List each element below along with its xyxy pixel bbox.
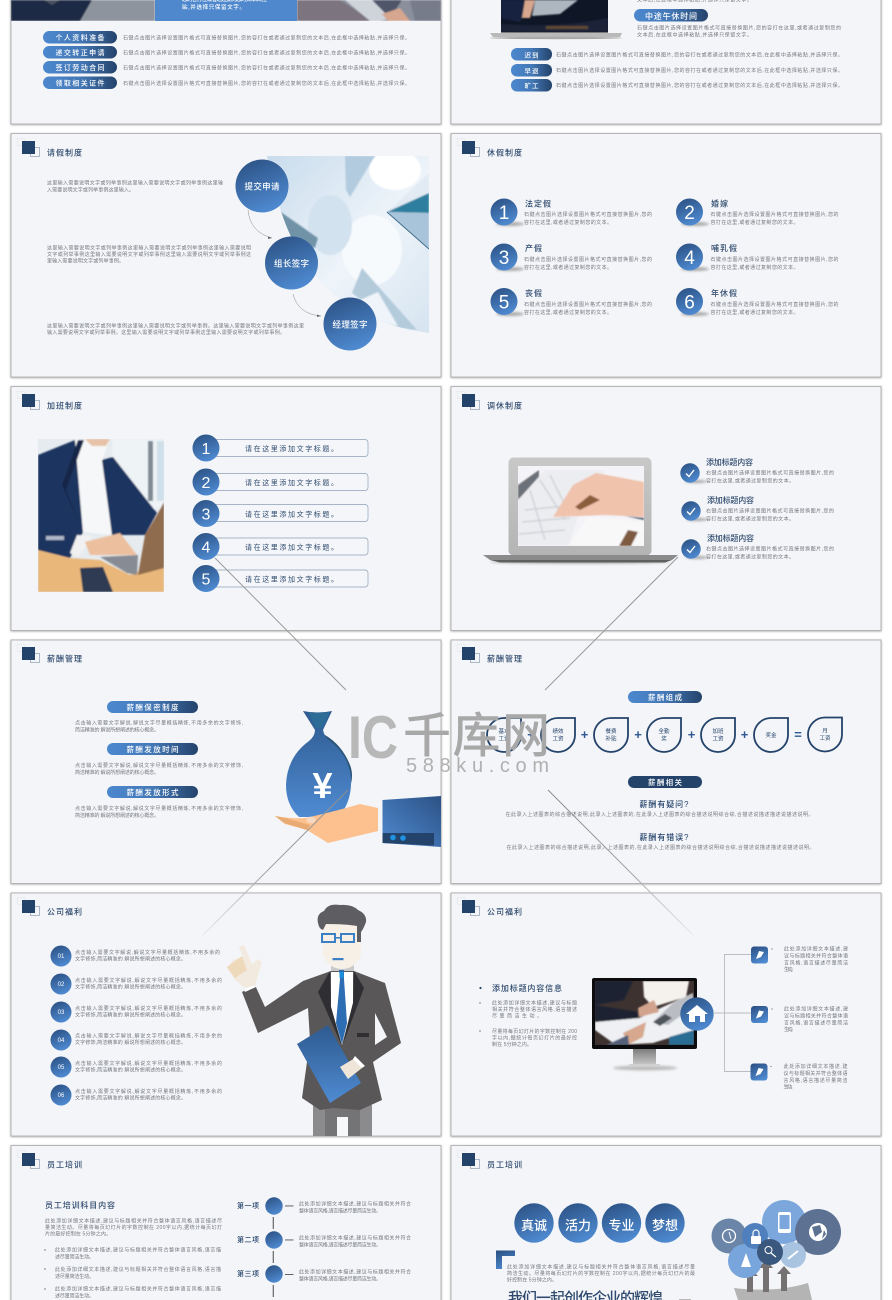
heading: 公司福利: 公司福利 (47, 906, 82, 916)
item 5: 丧假: 丧假 (525, 288, 542, 298)
item 4: 哺乳假: 哺乳假 (711, 243, 737, 253)
check item 1: 容打在这里,或者通过复制您的文本。 (706, 478, 794, 484)
text block: left description: 尽量简洁生动。 (492, 1012, 542, 1020)
panel: welfare diagram (451, 893, 881, 1136)
corner bracket (496, 1250, 515, 1269)
step circle: 经理签字 (324, 298, 376, 350)
list item 5 (192, 565, 368, 592)
item 6: 年休假: 容打在这里,或者通过复制您的文本。 (710, 309, 798, 316)
timeline: 第一项: 整体语言风格,语言描述尽量简洁生动。 (299, 1208, 381, 1214)
item 4: 哺乳假: 石键点击图片选择设置图片格式可直接替换图片,您的 (710, 256, 838, 263)
step: 个人资料准备 (43, 31, 410, 44)
header photo strip (11, 0, 441, 21)
break-time section: 中途午休时间 (645, 11, 697, 21)
drop: 全勤奖 (647, 718, 681, 752)
item 1: 法定假: 容打在这里,或者通过复制您的文本。 (524, 219, 612, 226)
text block: step 1: 这里输入需要说明文字或列举事例这里输入需要说明文字或列举事例这里输 (47, 180, 223, 186)
panel: holiday types (451, 134, 881, 377)
text with icon: branch 2: 议与标题相关并符合整体语 (784, 1012, 848, 1020)
step: 领取相关证件 (43, 76, 410, 89)
check item 2: 右键点击图片选择设置图片格式可直接替换图片,您的 (706, 508, 834, 514)
section: 薪酬发放形式: 点击输入需要文字解说,解说文字尽量概括精炼,不用多余的文字修饰, (75, 805, 243, 812)
timeline: 第三项: 第三项 (237, 1269, 259, 1278)
item 06 (50, 1084, 222, 1106)
value circle: 专业: 专业 (608, 1218, 634, 1233)
heading: 薪酬管理 (458, 644, 522, 664)
icon: home circle (680, 997, 714, 1031)
drop: 绩效工资: 工资 (552, 734, 564, 742)
step: 递交转正申请: 石键点击图片选择设置图片格式可直接替换图片,您的容打在或者通过复制您的文本后,在此框中选择粘贴,并选择只保。 (123, 50, 410, 56)
text with icon: branch 3: 此处添加详细文本描述,建 (784, 1063, 848, 1070)
arrow: step 1 to 2 (248, 210, 272, 239)
panel: time off in lieu (451, 386, 881, 630)
step: 递交转正申请 (43, 46, 410, 58)
step circle: 组长签字 (265, 236, 318, 290)
check item 1: 右键点击图片选择设置图片格式可直接替换图片,您的 (706, 470, 834, 476)
heading: 薪酬管理 (18, 644, 82, 664)
item 1: 法定假: 1 (499, 203, 509, 224)
text with icon: branch 2: 此处添加详细文本描述,建 (784, 1006, 848, 1012)
item 06: 06 (58, 1093, 65, 1099)
check item 3: 添加标题内容 (707, 533, 754, 543)
list item 3 (192, 500, 368, 527)
break-time section: 石键点击图片选择设置图片格式可直接替换图片,您的容打在这里,或者通过复制您的 (637, 24, 841, 32)
step: 个人资料准备: 石键点击图片选择设置图片格式可直接替换图片,您的容打在或者通过复制您的文本后,在此框中选择粘贴,并选择只保。 (123, 34, 410, 42)
item 5: 丧假: 5 (499, 292, 509, 314)
item 04: 04 (58, 1038, 65, 1044)
heading: 员工培训: 员工培训 (47, 1160, 82, 1170)
drop: 月工资 (808, 718, 842, 752)
check item 3: 右键点击图片选择设置图片格式可直接替换图片,您的 (706, 546, 834, 552)
question: 薪酬有错误 (506, 832, 814, 851)
timeline: 第三项: 整体语言风格,语言描述尽量简洁生动。 (299, 1276, 381, 1282)
illustration: money bag on hand (275, 711, 441, 847)
watermark: 千库网 588ku.com: 588ku.com (406, 755, 549, 777)
timeline: 第二项 (237, 1217, 411, 1249)
item 6: 年休假: 6 (684, 292, 695, 314)
heading: 薪酬管理: 薪酬管理 (47, 654, 82, 664)
item 4: 哺乳假 (676, 243, 838, 271)
check item 1: 添加标题内容 (706, 457, 753, 467)
text with icon: branch 3 (750, 1063, 848, 1090)
drop: 加班工资 (701, 718, 735, 752)
step: 签订劳动合同 (43, 61, 410, 74)
operators: + (581, 727, 589, 742)
drop: 基本工资 (487, 718, 521, 752)
section: 薪酬保密制度 (75, 701, 243, 734)
heading: 员工培训 (458, 1150, 522, 1170)
list item 4 (192, 533, 368, 560)
text block: step 3 (47, 322, 304, 336)
text block: step 3: 这里输入需要说明文字或列举事例这里输入需要说明文字或列举事例。这里输入需要说明文字或列举事例这里 (47, 322, 304, 330)
text with icon: branch 2: 生动。 (784, 1026, 796, 1033)
panel: onboarding steps (11, 0, 441, 124)
check item 2: 容打在这里,或者通过复制您的文本。 (706, 516, 794, 522)
list item 2: 请在这里添加文字标题。 (245, 478, 338, 487)
value circle: 活力: 活力 (565, 1218, 591, 1233)
question: 薪酬有错误: 在此录入上述图表的综合描述说明,此录入上述图表的,在此录入上述图表的综合描述说明综合综,合描述说描述描述说描述说明。 (506, 844, 814, 851)
rule: 早退: 石键点击图片选择设置图片格式可直接替换图片,您的容打在或者通过复制您的文本后,在此框中选择粘贴,并选择只保。 (556, 67, 843, 74)
text block: values description: 简洁生动。尽量将每页幻灯片的字数控制在 200字以内,据统计每页幻灯片的最 (507, 1270, 695, 1277)
heading: 加班制度 (18, 392, 82, 410)
panel: attendance rules (451, 0, 881, 124)
rule: 早退 (511, 64, 843, 76)
item 4: 哺乳假: 容打在这里,或者通过复制您的文本。 (710, 264, 798, 271)
item 04 (50, 1030, 222, 1050)
watermark: 千库网 588ku.com (348, 704, 550, 777)
text block: training content (44, 1200, 222, 1300)
text block: values description: 此处添加详细文本描述,建议与标题相关并符合整体语言风格,语言描述尽量 (507, 1264, 695, 1270)
heading: 员工培训 (18, 1150, 82, 1170)
item 01 (50, 946, 220, 966)
item 1: 法定假 (490, 198, 652, 226)
text with icon: branch 1: 此处添加详细文本描述,建 (784, 946, 848, 952)
item 05 (50, 1056, 222, 1078)
panel: salary secrecy and payment (11, 640, 441, 884)
section: 薪酬发放时间: 点击输入需要文字解说,解说文字尽量概括精炼,不用多余的文字修饰, (75, 762, 243, 769)
text with icon: branch 1: 生动。 (784, 966, 796, 973)
item 3: 产假: 3 (499, 248, 509, 269)
panel: welfare list (11, 893, 441, 1136)
monitor with meeting photo (592, 978, 697, 1070)
timeline: 第二项: 整体语言风格,语言描述尽量简洁生动。 (299, 1242, 381, 1248)
timeline: 第一项: 此处添加详细文本描述,建议与标题相关并符合 (299, 1200, 411, 1208)
drop: 餐费补贴: 补贴 (605, 734, 617, 742)
drop: 全勤奖: 全勤 (658, 727, 670, 735)
operators: = (794, 727, 802, 742)
text block: left description: 字以内,据统计每页幻灯片的最好控 (492, 1034, 577, 1042)
item 01: 点击输入需要文字解说,解说文字尽量概括精炼,不用多余的 (75, 949, 220, 956)
operators: + (527, 727, 535, 742)
watermark: diagonal lines (203, 557, 693, 935)
item 05: 文字修饰,简洁精准的 解说所想阐述的核心概念。 (75, 1066, 186, 1074)
check item 2: 添加标题内容 (707, 495, 754, 505)
item 2: 婚嫁: 容打在这里,或者通过复制您的文本。 (710, 219, 798, 226)
text block: training content: 此处添加详细文本描述,建议与标题相关并符合整体语言风格,语言描 (55, 1286, 221, 1292)
step circle: 提交申请: 提交申请 (244, 182, 280, 192)
break-time section: 文本后,在此框中选择粘贴,并选择只保留文字。 (637, 32, 752, 38)
watermark: 千库网 588ku.com: IC (348, 704, 398, 771)
item 3: 产假: 石键点击图片选择设置图片格式可直接替换图片,您的 (524, 256, 652, 263)
photo: man at laptop (38, 439, 164, 592)
drop: 基本工资: 基本 (498, 727, 510, 735)
question: 薪酬有疑问: 薪酬有疑问? (640, 799, 689, 809)
check item 3 (681, 533, 834, 560)
panel: leave request (11, 134, 441, 377)
section: 薪酬发放形式: 简洁精准的 解说所想阐述的核心概念。 (75, 812, 159, 819)
text block: training content: 此处添加详细文本描述,建议与标题相关并符合整体语言风格,语言描述尽 (45, 1218, 222, 1224)
drop: 月工资: 月 (822, 728, 828, 734)
step: 递交转正申请: 递交转正申请 (56, 48, 104, 57)
check item 2 (681, 495, 834, 522)
heading: 公司福利 (458, 898, 522, 916)
step circle: 提交申请 (236, 160, 288, 212)
item 05: 点击输入需要文字解说,解说文字尽量概括精炼,不用多余的 (75, 1060, 222, 1067)
item 2: 婚嫁 (676, 198, 838, 226)
photo: skyscrapers (267, 150, 429, 333)
timeline: 第三项 (237, 1251, 411, 1297)
heading: 休假制度: 休假制度 (487, 148, 522, 158)
heading: 调休制度 (458, 392, 522, 410)
item 3: 产假: 容打在这里,或者通过复制您的文本。 (524, 264, 612, 271)
item 2: 婚嫁: 婚嫁 (711, 198, 728, 208)
text with icon: branch 2 (751, 1006, 848, 1033)
value circle: 专业 (602, 1203, 641, 1243)
timeline: 第三项: 此处添加详细文本描述,建议与标题相关并符合 (299, 1268, 411, 1276)
text block: values description (507, 1264, 695, 1284)
text block: training content: 量简洁生动。尽量将每页幻灯片的字数控制在 200字以内,据统计每页幻灯 (45, 1224, 222, 1231)
value circle: 活力 (558, 1203, 598, 1243)
heading: 调休制度: 调休制度 (487, 400, 522, 410)
item 6: 年休假: 石键点击图片选择设置图片格式可直接替换图片,您的 (710, 301, 838, 308)
section: 薪酬发放形式 (75, 786, 243, 819)
text block: training content: 述尽量简洁生动。 (55, 1254, 94, 1260)
item 3: 产假 (490, 243, 652, 271)
item 4: 哺乳假: 4 (684, 248, 695, 269)
item 2: 婚嫁: 石键点击图片选择设置图片格式可直接替换图片,您的 (710, 211, 838, 218)
text block: step 1: 入需要说明文字或列举事例这里输入。 (47, 186, 134, 194)
item 03: 03 (58, 1010, 65, 1016)
item 5: 丧假 (490, 288, 652, 316)
text with icon: branch 3: 生动。 (784, 1084, 796, 1090)
heading: 薪酬管理: 薪酬管理 (487, 654, 522, 664)
drop: 奖金 (754, 718, 788, 752)
rule: 迟到 (511, 48, 843, 60)
drop: 餐费补贴 (594, 718, 628, 752)
item 6: 年休假: 年休假 (711, 288, 737, 298)
text with icon: branch 3: 言风格,语言描述尽量简洁 (784, 1077, 848, 1084)
text block: step 2: 这里输入需要说明文字或列举事例这里输入需要说明文字或列举事例这里输入需要说明 (47, 244, 251, 252)
item 05: 05 (58, 1065, 65, 1071)
text block: step 1 (47, 180, 223, 194)
section: 薪酬发放时间: 薪酬发放时间 (126, 744, 178, 754)
item 04: 文字修饰,简洁精准的 解说所想阐述的核心概念。 (75, 1039, 186, 1046)
drop: 餐费补贴: 餐费 (605, 727, 617, 735)
timeline: 第二项: 第二项 (237, 1235, 259, 1244)
panel: training subjects (11, 1146, 441, 1300)
text block: step 3: 输入需要说明文字或列举事例。这里输入需要说明文字或列举事例这里输入需要说明文字或列举事例。 (47, 329, 285, 336)
drop: 全勤奖: 奖 (661, 734, 667, 742)
value circle: 梦想: 梦想 (652, 1218, 678, 1233)
operators: + (688, 727, 696, 742)
text with icon: branch 3: 议与标题相关并符合整体语 (784, 1070, 848, 1077)
step: 签订劳动合同: 签订劳动合同 (56, 63, 104, 72)
list item 3: 请在这里添加文字标题。 (245, 510, 338, 518)
text block: training content: 述尽量简洁生动。 (55, 1273, 94, 1280)
text block: values description: 好控制在 5分钟之内。 (507, 1276, 557, 1284)
step circle: 经理签字: 经理签字 (332, 320, 368, 330)
section: 薪酬保密制度: 点击输入需要文字解说,解说文字尽量概括精炼,不用多余的文字修饰, (75, 720, 243, 726)
step: 签订劳动合同: 石键点击图片选择设置图片格式可直接替换图片,您的容打在或者通过复制您的文本后,在此框中选择粘贴,并选择只保。 (123, 64, 410, 72)
pill: 薪酬组成 (628, 691, 702, 703)
pill: 薪酬相关 (628, 776, 702, 788)
laptop with keyboard photo (483, 458, 678, 564)
list item 4: 4 (202, 540, 211, 556)
text block: left description: 制在 5分钟之内。 (492, 1041, 532, 1048)
panel: overtime (11, 386, 441, 630)
text block: left description (479, 983, 577, 1048)
item 06: 文字修饰,简洁精准的 解说所想阐述的核心概念。 (75, 1094, 186, 1102)
item 5: 丧假: 容打在这里,或者通过复制您的文本。 (524, 309, 612, 316)
rule: 旷工: 石键点击图片选择设置图片格式可直接替换图片,您的容打在或者通过复制您的文本后,在此框中选择粘贴,并选择只保。 (556, 82, 843, 89)
section: 薪酬发放时间: 简洁精准的 解说所想阐述的核心概念。 (75, 769, 159, 776)
item 5: 丧假: 石键点击图片选择设置图片格式可直接替换图片,您的 (524, 301, 652, 308)
connector lines (713, 954, 751, 1072)
item 02: 02 (58, 982, 65, 988)
step: 领取相关证件: 石键点击图片选择设置图片格式可直接替换图片,您的容打在或者通过复制您的文本后,在此框中选择粘贴,并选择只保。 (123, 80, 410, 87)
list item 1: 1 (202, 441, 211, 458)
item 03: 文字修饰,简洁精准的 解说所想阐述的核心概念。 (75, 1012, 186, 1018)
item 02: 点击输入需要文字解说,解说文字尽量概括精炼,不用多余的 (75, 977, 222, 984)
list item 2: 2 (202, 475, 211, 492)
text block: left description: 此处添加详细文本描述,建议与标题 (492, 1000, 577, 1006)
item 02: 文字修饰,简洁精准的 解说所想阐述的核心概念。 (75, 984, 186, 990)
heading: 公司福利: 公司福利 (487, 906, 522, 916)
item 2: 婚嫁: 2 (684, 203, 695, 224)
pill: 薪酬相关: 薪酬相关 (648, 777, 682, 787)
text block: step 2: 文字或列举事例这里输入需要说明文字或列举事例这里输入需要说明文字或列举事例这 (47, 251, 251, 258)
drop: 奖金: 奖金 (765, 731, 777, 739)
text block: training content: 员工培训科目内容 (45, 1200, 115, 1210)
drop: 月工资: 工资 (819, 734, 831, 742)
item 1: 法定假: 石键点击图片选择设置图片格式可直接替换图片,您的 (524, 211, 652, 218)
item 03: 点击输入需要文字解说,解说文字尽量概括精炼,不用多余的 (75, 1005, 222, 1012)
rule: 旷工 (511, 79, 843, 92)
list item 3: 3 (202, 506, 211, 524)
heading: 加班制度: 加班制度 (47, 400, 82, 410)
step: 领取相关证件: 领取相关证件 (56, 78, 104, 88)
drop: 绩效工资 (541, 718, 575, 752)
operators (527, 727, 802, 742)
operators: + (741, 727, 749, 742)
list item 5: 请在这里添加文字标题。 (245, 574, 338, 584)
header photo strip: 贴,并选择只保留文字。 (182, 3, 245, 11)
check item 3: 容打在这里,或者通过复制您的文本。 (706, 554, 794, 560)
section: 薪酬发放形式: 薪酬发放形式 (126, 787, 179, 797)
rule: 早退: 早退 (524, 66, 539, 75)
item 01: 文字修饰,简洁精准的 解说所想阐述的核心概念。 (75, 956, 186, 962)
illustration: idea tree icons (712, 1200, 841, 1300)
rule: 迟到: 迟到 (524, 50, 538, 60)
formula: salary components (487, 718, 842, 752)
text with icon: branch 2: 言风格,语言描述尽量简洁 (784, 1020, 848, 1026)
text block: left description: 尽量将每页幻灯片的字数控制在 200 (492, 1028, 577, 1035)
laptop photo (490, 0, 622, 39)
text block: step 2: 里输入需要说明文字或列举事例。 (47, 258, 124, 264)
text with icon: branch 1: 言风格,语言描述尽量简洁 (784, 960, 848, 966)
text block: step 2 (47, 244, 251, 264)
break-time section (634, 0, 841, 38)
text block: training content: 此处添加详细文本描述,建议与标题相关并符合整体语言风格,语言描 (55, 1266, 221, 1273)
question: 薪酬有疑问: 在此录入上述图表的综合描述说明,此录入上述图表的,在此录入上述图表的综合描述说明综合综,合描述说描述描述说描述说明。 (506, 811, 814, 818)
text block: left description: 相关并符合整体语言风格,语言描述 (492, 1006, 577, 1013)
panel: company values (451, 1146, 881, 1300)
arrow: step 2 to 3 (293, 294, 321, 317)
heading: 休假制度 (458, 138, 522, 158)
section: 薪酬发放时间 (75, 743, 243, 776)
heading: 请假制度 (18, 138, 82, 158)
text with icon: branch 1: 议与标题相关并符合整体语 (784, 952, 848, 960)
text block: left description: 添加标题内容信息 (492, 983, 562, 993)
item 06: 点击输入需要文字解说,解说文字尽量概括精炼,不用多余的 (75, 1088, 222, 1095)
timeline: 第一项: 第一项 (237, 1201, 259, 1210)
item 6: 年休假 (676, 288, 838, 316)
text block: training content: 述尽量简洁生动。 (55, 1292, 94, 1300)
list item 4: 请在这里添加文字标题。 (245, 542, 338, 552)
list item 5: 5 (202, 572, 211, 588)
pill: 薪酬组成: 薪酬组成 (648, 692, 682, 702)
text block: training content: 片的最好控制在 5分钟之内。 (45, 1230, 111, 1238)
item 01: 01 (58, 954, 65, 960)
value circle: 梦想 (645, 1203, 685, 1243)
list item 2 (192, 468, 368, 496)
section: 薪酬保密制度: 简洁精准的 解说所想阐述的核心概念。 (75, 726, 159, 734)
illustration: businessman with folder (227, 905, 401, 1136)
section: 薪酬保密制度: 薪酬保密制度 (126, 702, 179, 712)
drop: 基本工资: 工资 (498, 734, 510, 742)
item 1: 法定假: 法定假 (525, 198, 551, 208)
watermark: 千库网 588ku.com: 千库网 (403, 710, 550, 763)
item 03 (50, 1002, 222, 1022)
step: 个人资料准备: 个人资料准备 (56, 33, 104, 42)
panel: salary composition (451, 640, 881, 884)
drop: 加班工资: 工资 (712, 734, 724, 742)
drop: 绩效工资: 绩效 (552, 727, 564, 735)
check item 1 (680, 457, 834, 484)
list item 1: 请在这里添加文字标题。 (245, 444, 338, 453)
list item 1 (192, 434, 368, 462)
heading: 请假制度: 请假制度 (47, 148, 82, 158)
item 3: 产假: 产假 (525, 243, 542, 253)
rule: 旷工: 旷工 (524, 81, 539, 90)
illustration: money bag on hand: ¥ (312, 765, 333, 806)
question: 薪酬有疑问 (506, 799, 814, 818)
value circle: 真诚 (514, 1203, 554, 1243)
heading: 公司福利 (18, 898, 82, 916)
drop: 加班工资: 加班 (712, 727, 724, 735)
step circle: 组长签字: 组长签字 (274, 258, 309, 268)
operators: + (634, 727, 642, 742)
value circle: 真诚: 真诚 (521, 1218, 547, 1233)
timeline: 第二项: 此处添加详细文本描述,建议与标题相关并符合 (299, 1234, 411, 1242)
rule: 迟到: 石键点击图片选择设置图片格式可直接替换图片,您的容打在或者通过复制您的文本后,在此框中选择粘贴,并选择只保。 (556, 52, 843, 58)
question: 薪酬有错误: 薪酬有错误? (640, 832, 689, 842)
heading: 员工培训: 员工培训 (487, 1160, 522, 1170)
timeline: 第一项 (237, 1197, 411, 1215)
item 02 (50, 974, 222, 994)
text block: training content: 此处添加详细文本描述,建议与标题相关并符合整体语言风格,语言描 (55, 1246, 221, 1254)
item 04: 点击输入需要文字解说,解说文字尽量概括精炼,不用多余的 (75, 1032, 222, 1040)
text with icon: branch 1 (751, 946, 848, 973)
